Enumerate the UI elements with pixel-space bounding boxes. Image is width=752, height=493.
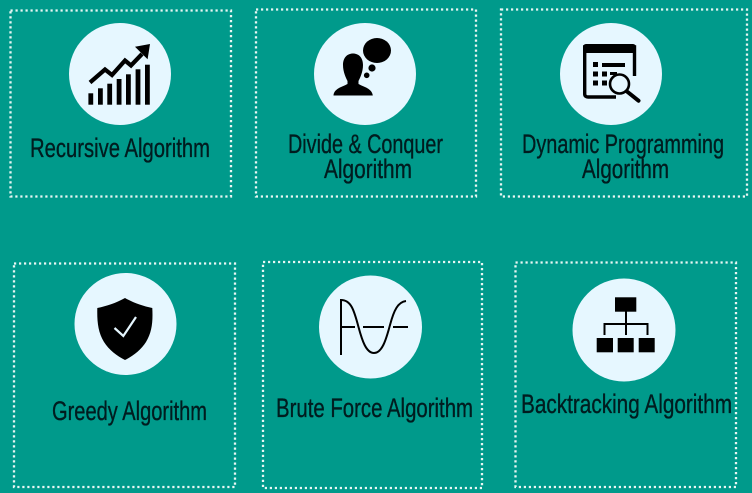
icon: hierarchy diagram — [597, 297, 655, 352]
panel: recursive algorithm — [10, 10, 231, 196]
label: divide and conquer algorithm: Divide & Conquer — [288, 129, 443, 159]
icon: rising bar chart with arrow — [88, 44, 150, 105]
panel: backtracking algorithm — [516, 262, 736, 487]
label: greedy algorithm: Greedy Algorithm — [52, 396, 207, 426]
label: dynamic programming algorithm: Algorithm — [582, 154, 669, 184]
icon: table with magnifier — [583, 44, 638, 101]
icon: shield with check mark — [97, 298, 152, 360]
label: dynamic programming algorithm — [522, 129, 724, 184]
label: divide and conquer algorithm: Algorithm — [324, 154, 412, 184]
icon: wave curve — [341, 300, 408, 355]
label: divide and conquer algorithm — [288, 129, 443, 184]
panel: brute force algorithm — [263, 262, 482, 488]
panel: greedy algorithm — [14, 264, 235, 487]
label: recursive algorithm: Recursive Algorithm — [30, 133, 210, 163]
icon: person with thought bubble — [334, 38, 391, 96]
panel: dynamic programming algorithm — [501, 10, 747, 196]
panel: divide and conquer algorithm — [256, 10, 476, 196]
label: brute force algorithm: Brute Force Algorithm — [276, 393, 473, 423]
